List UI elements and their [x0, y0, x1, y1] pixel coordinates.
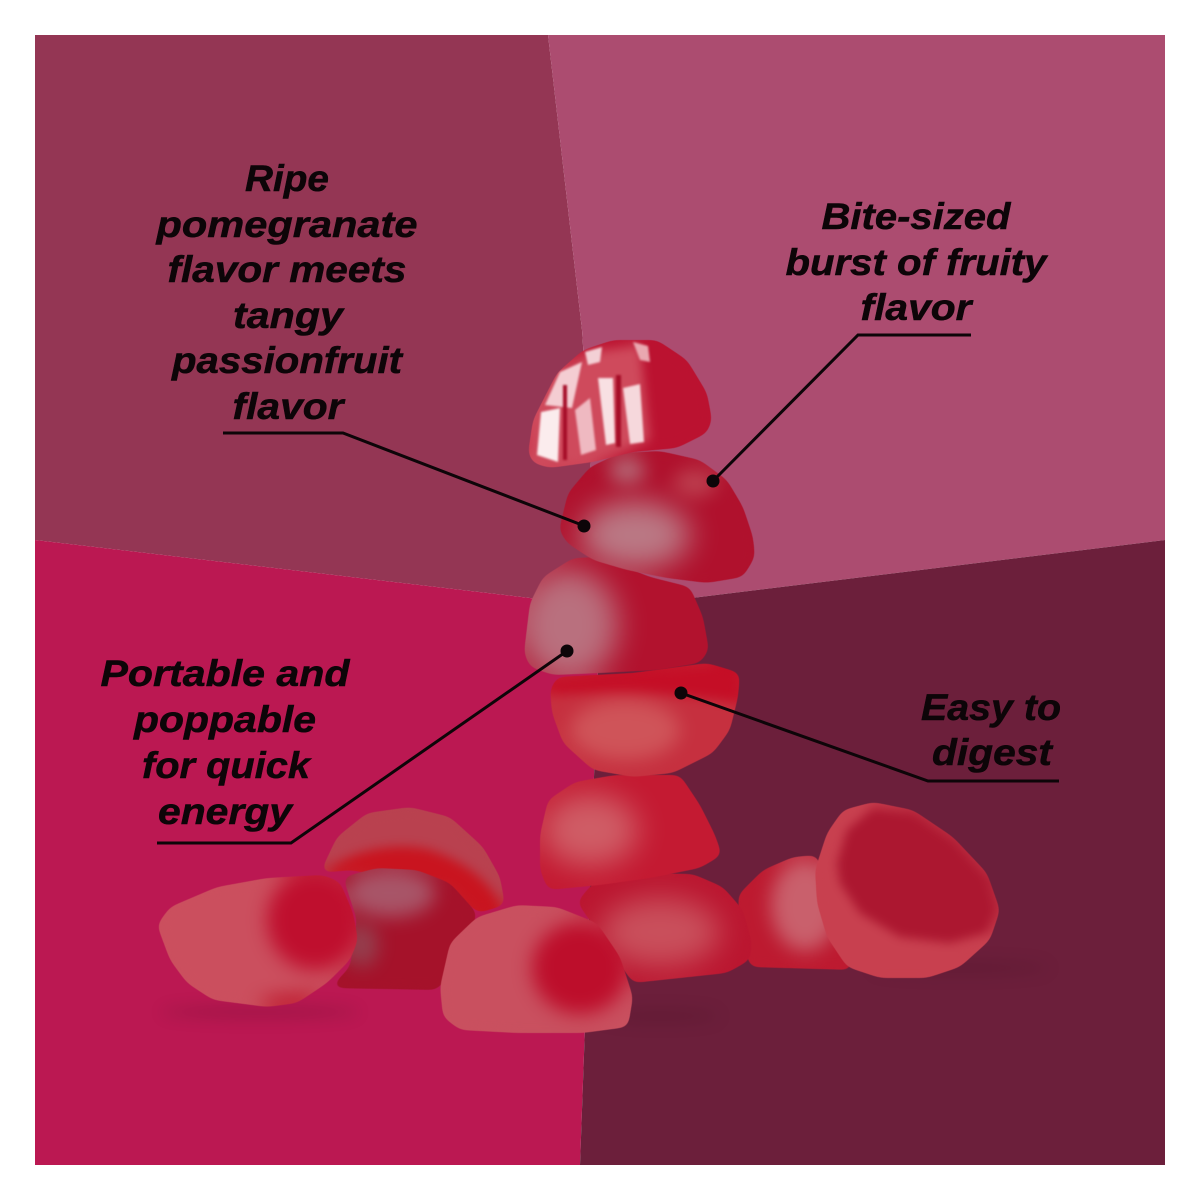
text: ripe pomegranate: Ripe — [245, 158, 329, 199]
gummy: left middle — [337, 868, 476, 990]
leader line: portable — [157, 644, 574, 843]
callout: portable — [100, 644, 574, 843]
panel: top right — [548, 35, 1165, 610]
text: portable — [100, 653, 351, 832]
gummy: front centre — [440, 905, 632, 1034]
text: portable: Portable and — [100, 653, 351, 694]
gummy: stack three — [524, 557, 708, 675]
panel: bottom right — [580, 540, 1165, 1165]
leader line: ripe pomegranate — [223, 433, 590, 532]
text: ripe pomegranate: flavor meets — [168, 249, 406, 290]
text: ripe pomegranate — [155, 158, 418, 427]
callout: ripe pomegranate — [155, 158, 591, 532]
callout: easy to digest — [674, 686, 1061, 781]
text: ripe pomegranate: flavor — [232, 386, 346, 427]
callout: bite-sized — [706, 196, 1049, 488]
gummy: stack two — [560, 451, 754, 583]
text: bite-sized: flavor — [860, 287, 974, 328]
gummy: bitten top glare — [537, 342, 650, 462]
gummy shadows — [160, 961, 1050, 1023]
gummy: bitten top — [528, 340, 712, 468]
text: ripe pomegranate: pomegranate — [155, 204, 418, 245]
gummy: far left — [158, 875, 358, 1007]
text: portable: for quick — [142, 745, 313, 786]
text: portable: energy — [158, 791, 295, 832]
gummy: back right — [738, 856, 849, 970]
leader line: bite-sized — [706, 335, 971, 488]
panel: bottom left — [35, 540, 600, 1165]
gummies: pile and stack — [150, 335, 1000, 1040]
gummy: back left — [324, 808, 504, 912]
gummy: right round — [815, 802, 1000, 978]
gummy: stack four — [550, 664, 740, 776]
panel: top left — [35, 35, 600, 610]
text: bite-sized: Bite-sized — [822, 196, 1012, 237]
text: bite-sized — [786, 196, 1049, 328]
gummy: stack five — [540, 774, 720, 890]
text: ripe pomegranate: passionfruit — [171, 340, 404, 381]
text: easy to digest: digest — [932, 732, 1054, 773]
text: bite-sized: burst of fruity — [786, 242, 1049, 283]
text: easy to digest: Easy to — [921, 687, 1061, 728]
text: portable: poppable — [133, 699, 316, 740]
text: ripe pomegranate: tangy — [233, 295, 346, 336]
text: easy to digest — [921, 687, 1061, 773]
gummy: bottom of stack — [580, 874, 748, 982]
leader line: easy to digest — [674, 686, 1059, 781]
